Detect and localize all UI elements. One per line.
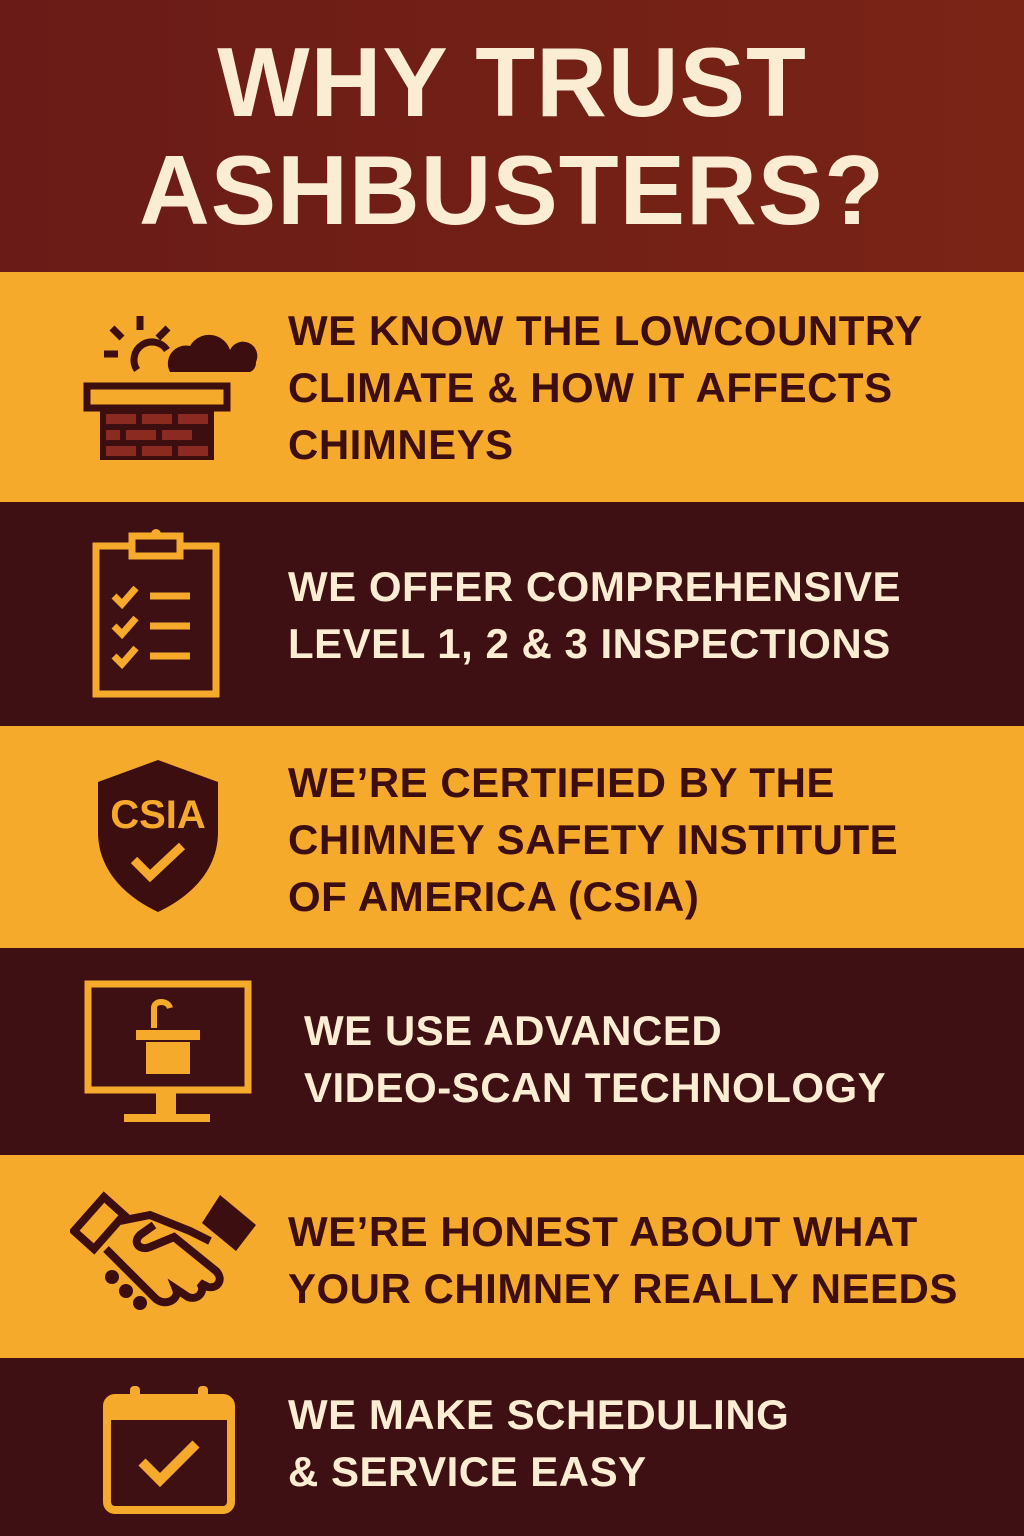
title: ASHBUSTERS?: [139, 135, 885, 245]
panel: honest: [0, 1155, 1024, 1358]
text: [288, 1208, 958, 1312]
text: WE KNOW THE LOWCOUNTRY: [288, 307, 923, 354]
icon: monitor: [84, 980, 252, 1122]
panel: certified: [0, 726, 1024, 948]
text: OF AMERICA (CSIA): [288, 873, 699, 920]
text: VIDEO-SCAN TECHNOLOGY: [304, 1064, 886, 1111]
text: WE’RE CERTIFIED BY THE: [288, 759, 835, 806]
icon: CSIA shield: [98, 760, 218, 912]
text: [288, 563, 901, 667]
text: [288, 759, 898, 920]
text: & SERVICE EASY: [288, 1448, 647, 1495]
panel: scheduling: [0, 1358, 1024, 1536]
text: [288, 1391, 789, 1495]
panel: inspections: [0, 502, 1024, 726]
text: [288, 307, 923, 468]
icon: handshake: [70, 1191, 256, 1310]
icon: CSIA shield: CSIA: [110, 793, 206, 837]
title: [139, 27, 885, 245]
text: [304, 1007, 886, 1111]
icon: chimney weather: [84, 316, 258, 460]
text: CHIMNEYS: [288, 421, 514, 468]
text: CLIMATE & HOW IT AFFECTS: [288, 364, 893, 411]
text: WE USE ADVANCED: [304, 1007, 722, 1054]
panel: video scan: [0, 948, 1024, 1155]
text: LEVEL 1, 2 & 3 INSPECTIONS: [288, 620, 891, 667]
text: WE OFFER COMPREHENSIVE: [288, 563, 901, 610]
text: WE MAKE SCHEDULING: [288, 1391, 789, 1438]
text: WE’RE HONEST ABOUT WHAT: [288, 1208, 918, 1255]
text: YOUR CHIMNEY REALLY NEEDS: [288, 1265, 958, 1312]
icon: calendar: [103, 1386, 235, 1514]
icon: clipboard: [92, 529, 220, 698]
text: CHIMNEY SAFETY INSTITUTE: [288, 816, 898, 863]
panel: climate: [0, 272, 1024, 502]
title: WHY TRUST: [217, 27, 807, 137]
header: [0, 0, 1024, 272]
